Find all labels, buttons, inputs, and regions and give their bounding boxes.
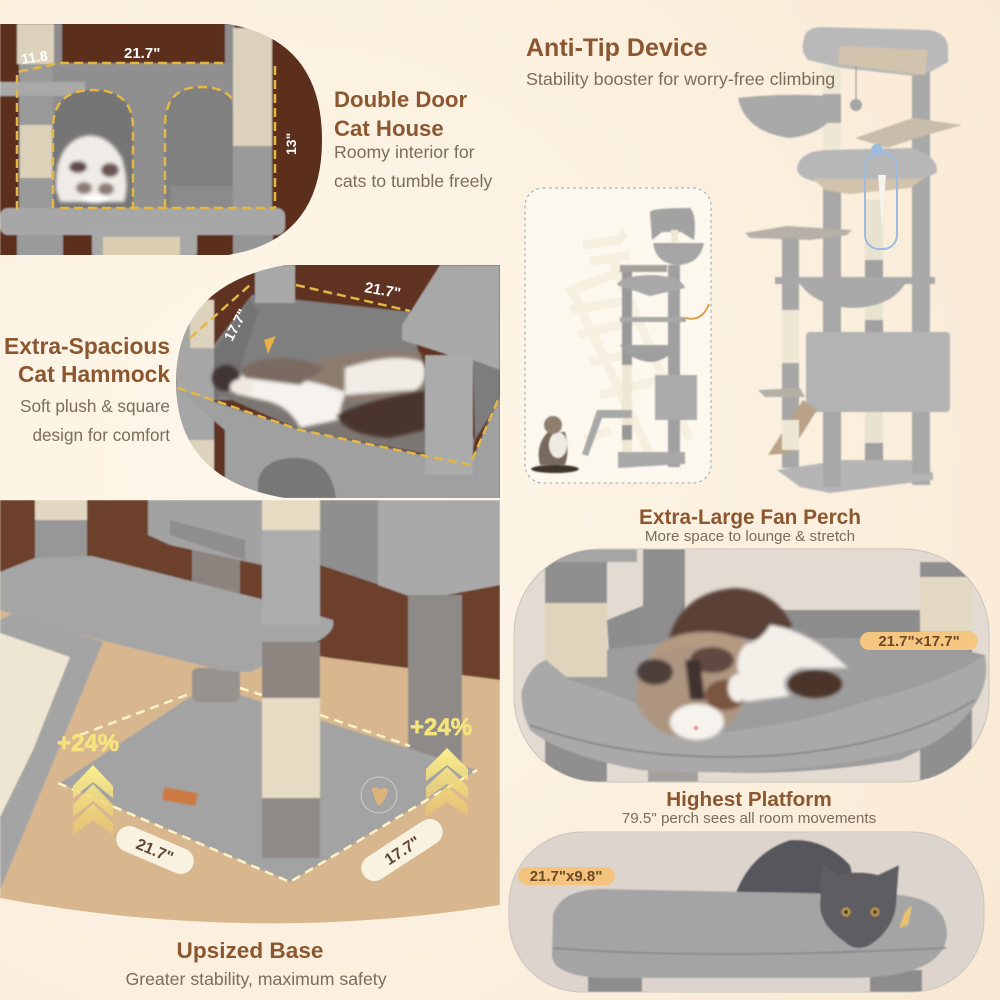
label: 17.7 inch base depth (356, 814, 448, 886)
icon: cat in hammock (212, 351, 425, 438)
text: anti-tip description: Stability booster for worry-free climbing (526, 69, 835, 89)
dimension labels: cat house: 21.7" (124, 45, 160, 62)
label: 21.7 inch base width (112, 822, 198, 878)
text: upsized base description: Greater stability, maximum safety (125, 969, 387, 989)
dimension labels: cat house (20, 45, 299, 155)
icon: heart badge (361, 777, 397, 813)
label: +24% right with arrows: +24% (410, 714, 472, 741)
heading: extra-spacious hammock: Cat Hammock (18, 361, 170, 387)
label: 17.7 inch base depth: 17.7" (382, 834, 424, 869)
illustration: inset cat (531, 416, 579, 473)
heading: double door cat house: Double Door (334, 87, 467, 112)
label: +24% left with arrows: +24% (57, 730, 119, 757)
panel: fan perch border (514, 549, 989, 782)
label: +24% left with arrows (57, 730, 119, 835)
text: cat house description: cats to tumble freely (334, 171, 492, 191)
label: +24% right with arrows (410, 714, 472, 816)
panel: highest platform border (509, 832, 984, 992)
heading: extra-large fan perch: Extra-Large Fan Perch (639, 506, 861, 529)
dimension labels: hammock: 21.7" (363, 279, 402, 302)
label: 21.7 inch base width: 21.7" (133, 836, 176, 867)
label: highest platform size: 21.7"x9.8" (530, 868, 602, 885)
icon: cat in door (56, 136, 127, 203)
panel: hammock photo (170, 260, 505, 505)
panel: double door cat house photo (0, 24, 322, 255)
dimension labels: cat house: 11.8 (20, 47, 49, 67)
icon: anti-tip strap clip (865, 144, 897, 249)
text: fan perch description: More space to lounge & stretch (645, 528, 855, 545)
text: cat house description: Roomy interior for (334, 142, 475, 162)
icon: ragdoll cat (636, 588, 848, 740)
heading: extra-spacious hammock: Extra-Spacious (4, 333, 170, 359)
panel: anti-tip inset (525, 188, 711, 483)
dimension labels: hammock (221, 279, 402, 354)
panel: highest platform photo (509, 832, 984, 995)
text: hammock description: Soft plush & square (20, 396, 170, 416)
text: hammock description: design for comfort (32, 425, 170, 445)
illustration: full cat tree (738, 27, 962, 493)
heading: highest platform: Highest Platform (666, 788, 832, 811)
heading: upsized base: Upsized Base (177, 938, 323, 963)
label: fan perch size (860, 632, 978, 650)
dimension labels: hammock: 17.7" (221, 306, 251, 343)
panel: upsized base photo (0, 500, 500, 960)
heading: double door cat house: Cat House (334, 116, 444, 141)
illustration: inset cat tree (582, 208, 704, 468)
panel: fan perch photo (514, 549, 989, 782)
dimension labels: cat house: 13" (283, 133, 299, 155)
heading: anti-tip device: Anti-Tip Device (526, 34, 708, 62)
illustration: ghost tilted tree (567, 232, 690, 465)
label: fan perch size: 21.7"×17.7" (878, 633, 960, 650)
text: highest platform description: 79.5" perch sees all room movements (622, 810, 877, 827)
